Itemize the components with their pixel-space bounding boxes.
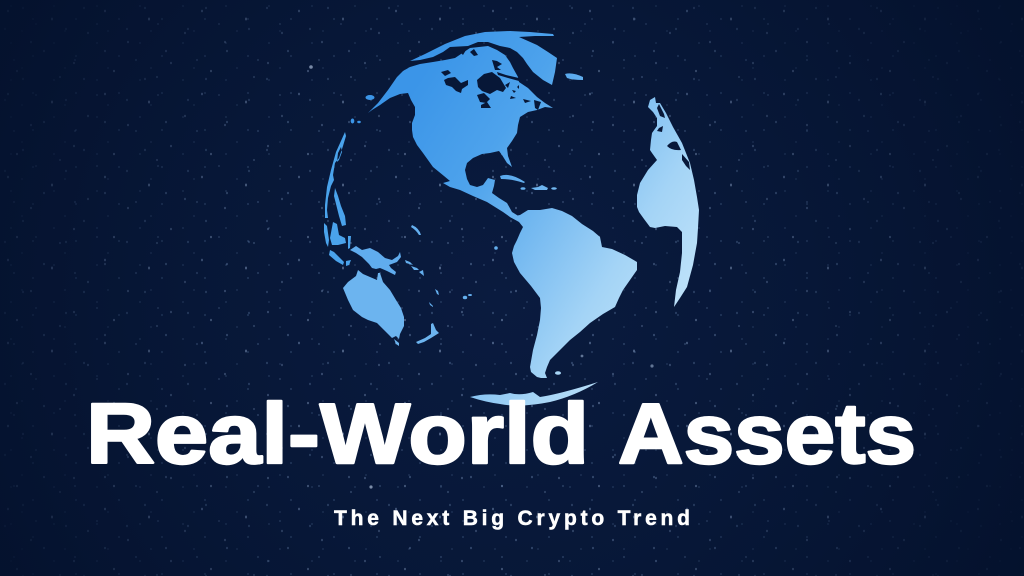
- continent: Arctic and Greenland crescent: [410, 31, 557, 85]
- continent: Australia: [343, 270, 404, 339]
- continent: Antarctica: [470, 382, 598, 406]
- aleutian islands: [351, 95, 374, 124]
- title: Assets: [618, 387, 916, 482]
- falkland island: [555, 371, 561, 375]
- pacific island chains: [405, 225, 498, 307]
- subtitle: The Next Big Crypto Trend: [334, 507, 690, 530]
- hudson bay and inland waters: [441, 49, 541, 110]
- continent: Asia rim: [324, 132, 351, 266]
- title: Real-World: [86, 387, 589, 482]
- caribbean islands: [500, 175, 557, 190]
- tasmania tip: [394, 339, 399, 346]
- new zealand: [416, 323, 439, 344]
- continent: North America: [368, 46, 553, 220]
- globe: [324, 31, 699, 406]
- title: [86, 387, 916, 482]
- continent: Africa and Europe edge: [637, 97, 699, 307]
- new guinea: [350, 246, 401, 275]
- icelandic island: [565, 73, 583, 80]
- continent: South America: [510, 208, 637, 378]
